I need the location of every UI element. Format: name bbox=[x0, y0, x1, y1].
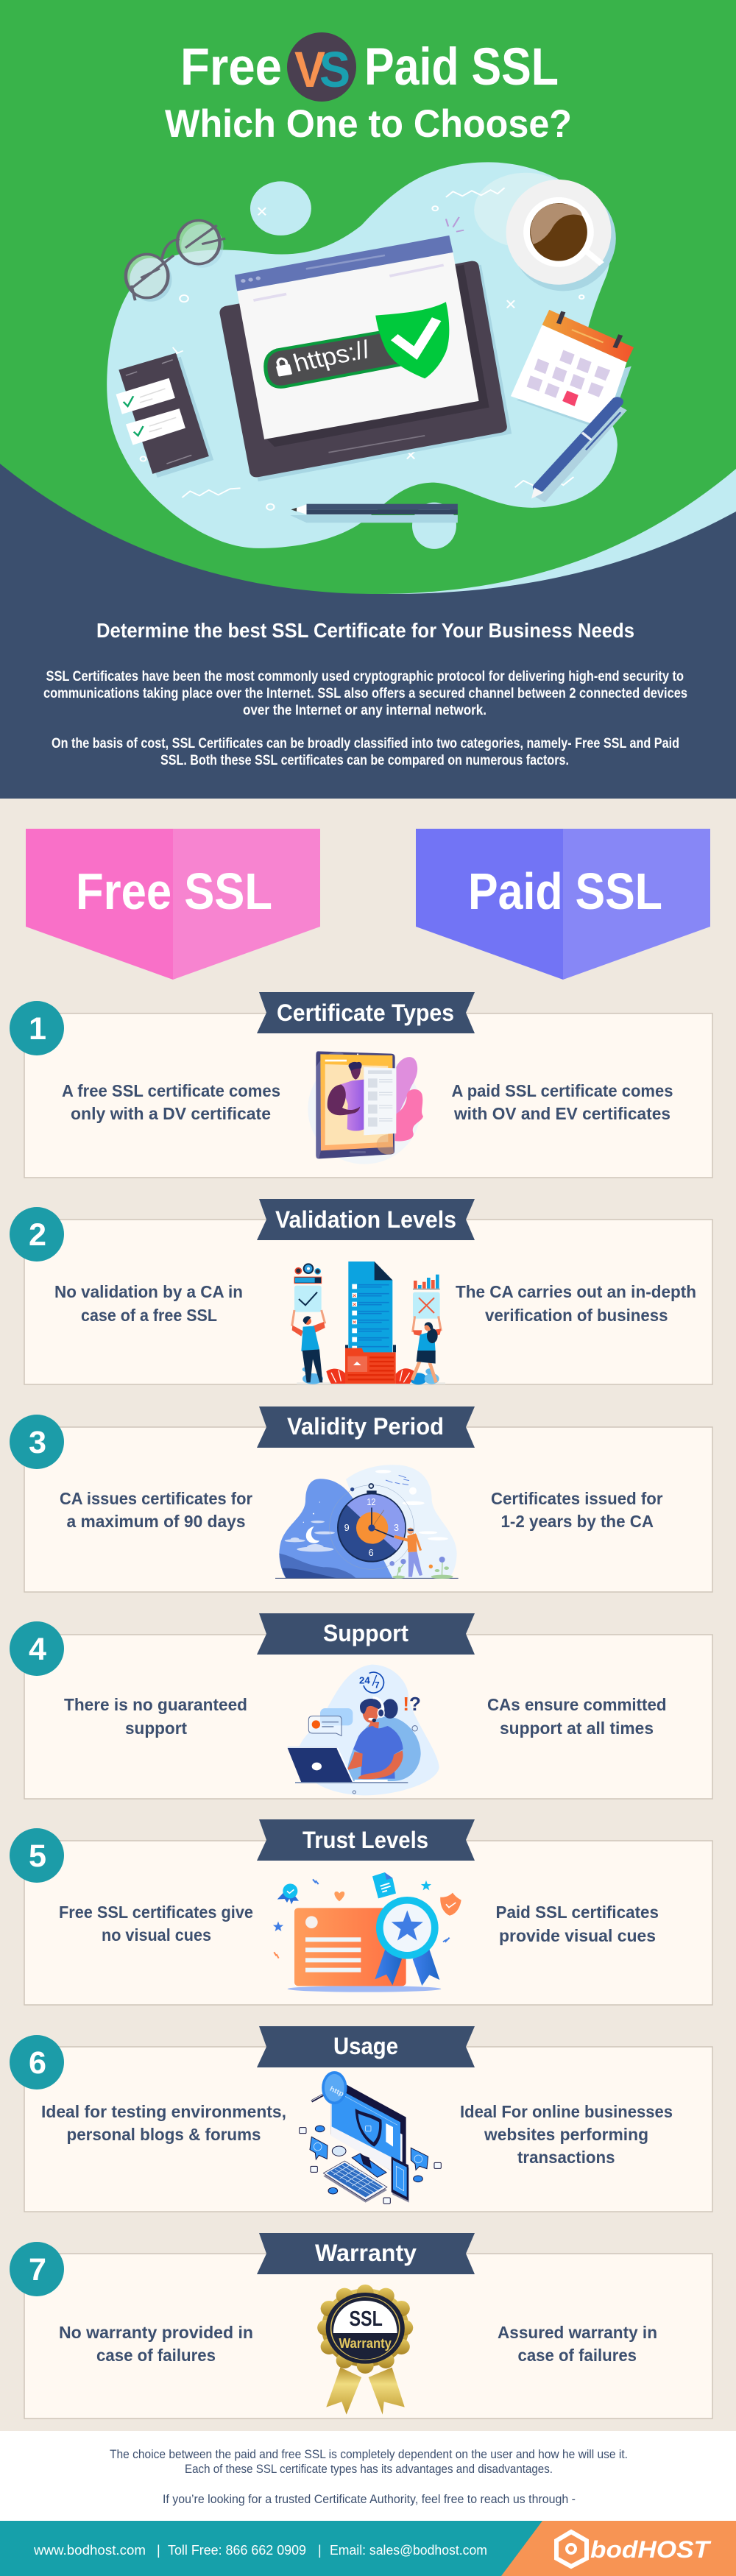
free text bbox=[59, 1903, 253, 1945]
free text: case of failures bbox=[96, 2346, 216, 2365]
illustration: warranty seal bbox=[317, 2285, 413, 2415]
illustration: isometric monitor bbox=[300, 2073, 441, 2204]
free text: case of a free SSL bbox=[81, 1306, 217, 1325]
pennant: free ssl: Free SSL bbox=[76, 863, 272, 920]
side panel bbox=[386, 2123, 393, 2147]
24/7: 7 bbox=[375, 1680, 380, 1690]
panel: validation levels bbox=[10, 1199, 712, 1384]
number 7: 7 bbox=[29, 2252, 46, 2287]
right person with cross bbox=[412, 1275, 441, 1382]
ribbon: Support bbox=[323, 1620, 408, 1646]
agent bbox=[347, 1698, 403, 1779]
heart bbox=[334, 1892, 344, 1901]
decorative squiggles bbox=[141, 188, 584, 510]
title: Free bbox=[180, 38, 282, 96]
free text: A free SSL certificate comes bbox=[62, 1081, 280, 1100]
logo: bodHOST bbox=[590, 2536, 712, 2563]
paid text: A paid SSL certificate comes bbox=[452, 1081, 673, 1100]
phone bbox=[116, 347, 213, 478]
contact details: www.bodhost.com bbox=[33, 2543, 146, 2558]
pennant: free ssl bbox=[26, 829, 320, 980]
paid text: verification of business bbox=[485, 1306, 668, 1325]
ribbon bbox=[257, 992, 475, 1033]
ribbon: Validation Levels bbox=[275, 1206, 456, 1233]
paid text: support at all times bbox=[500, 1719, 654, 1738]
illustration: support agent bbox=[288, 1665, 439, 1795]
browser page bbox=[237, 252, 479, 439]
illustration: tablet person bbox=[308, 1051, 423, 1164]
logo bbox=[556, 2532, 712, 2566]
mini badge bbox=[277, 1883, 299, 1904]
phone bbox=[392, 2156, 409, 2203]
paid text: case of failures bbox=[518, 2346, 637, 2365]
number 1: 1 bbox=[29, 1011, 46, 1047]
sheet bbox=[364, 1067, 396, 1135]
ribbon: Certificate Types bbox=[277, 999, 454, 1026]
free text bbox=[64, 1695, 247, 1738]
paid text bbox=[456, 1282, 696, 1325]
illustration: warranty seal: SSL bbox=[350, 2307, 383, 2331]
number 6 bbox=[10, 2035, 64, 2090]
left person with check bbox=[292, 1264, 325, 1382]
magnifier bbox=[311, 2073, 346, 2103]
contact details: Toll Free: 866 662 0909 bbox=[168, 2543, 306, 2558]
chat bubbles bbox=[320, 1708, 353, 1725]
closing text: The choice between the paid and free SSL is completely dependent on the user and how he will use it. bbox=[110, 2447, 628, 2461]
hero illustration bbox=[107, 162, 634, 549]
free text: Free SSL certificates give bbox=[59, 1903, 253, 1922]
panel: warranty bbox=[10, 2233, 712, 2418]
illustration: clock: 3 bbox=[394, 1523, 399, 1533]
man bbox=[394, 1528, 422, 1577]
vs badge: S bbox=[319, 41, 350, 98]
clock face bbox=[330, 1485, 414, 1569]
paid text: transactions bbox=[517, 2148, 615, 2167]
lilac rays bbox=[446, 217, 464, 232]
calendar bbox=[511, 310, 634, 432]
panel: validity period bbox=[10, 1406, 712, 1592]
ribbon bbox=[257, 1406, 475, 1448]
paid text bbox=[491, 1489, 663, 1531]
panel: certificate types bbox=[10, 992, 712, 1178]
speech tiles bbox=[310, 2137, 428, 2170]
number 2: 2 bbox=[29, 1217, 46, 1253]
stand bbox=[352, 2154, 386, 2177]
number 1 bbox=[10, 1001, 64, 1055]
free text: Ideal for testing environments, bbox=[41, 2102, 286, 2121]
light blue arc band bbox=[353, 442, 736, 594]
paid text: CAs ensure committed bbox=[487, 1695, 667, 1714]
illustration: support agent: ! bbox=[403, 1693, 409, 1715]
red leaves bbox=[326, 1368, 414, 1384]
free text bbox=[62, 1081, 280, 1123]
shield bbox=[375, 302, 449, 378]
free text: only with a DV certificate bbox=[71, 1104, 271, 1123]
ribbon bbox=[257, 1199, 475, 1240]
paid text: websites performing bbox=[484, 2125, 648, 2144]
ribbon bbox=[257, 1819, 475, 1861]
free text bbox=[54, 1282, 243, 1325]
paid text: Ideal For online businesses bbox=[460, 2102, 673, 2121]
pen bbox=[531, 402, 622, 500]
intro paragraphs: SSL. Both these SSL certificates can be compared on numerous factors. bbox=[160, 753, 569, 768]
squiggles bbox=[313, 1879, 319, 1884]
https text: https:// bbox=[290, 336, 374, 378]
intro paragraphs: over the Internet or any internal network. bbox=[243, 703, 486, 718]
plants bbox=[389, 1557, 453, 1579]
green hero area bbox=[0, 0, 736, 594]
folder bbox=[345, 1345, 348, 1352]
24/7 bbox=[359, 1672, 383, 1693]
number 4 bbox=[10, 1621, 64, 1676]
illustration: clock: 12 bbox=[367, 1497, 375, 1507]
title: Paid SSL bbox=[364, 38, 559, 96]
paid text: with OV and EV certificates bbox=[453, 1104, 670, 1123]
contact details: | bbox=[157, 2543, 160, 2558]
ribbon: Warranty bbox=[315, 2240, 417, 2266]
https address bar bbox=[266, 328, 413, 387]
number 5: 5 bbox=[29, 1839, 46, 1874]
panel: usage bbox=[10, 2026, 712, 2212]
paid text: Paid SSL certificates bbox=[496, 1903, 659, 1922]
laptop bbox=[288, 1747, 408, 1783]
paid text bbox=[487, 1695, 667, 1738]
pennant: paid ssl bbox=[416, 829, 710, 980]
keyboard bbox=[323, 2161, 387, 2203]
free text bbox=[60, 1489, 252, 1531]
illustration: support agent: ? bbox=[409, 1693, 421, 1715]
ribbon: Trust Levels bbox=[302, 1827, 428, 1853]
title bbox=[165, 32, 572, 146]
panel: support bbox=[10, 1613, 712, 1799]
number 5 bbox=[10, 1828, 64, 1883]
small cubes and gears bbox=[300, 2126, 441, 2204]
closing text: Each of these SSL certificate types has its advantages and disadvantages. bbox=[185, 2462, 553, 2476]
steam haze bbox=[474, 173, 577, 248]
intro heading: Determine the best SSL Certificate for Your Business Needs bbox=[96, 619, 634, 642]
glasses bbox=[126, 220, 225, 302]
paid text: provide visual cues bbox=[499, 1926, 656, 1945]
free text: There is no guaranteed bbox=[64, 1695, 247, 1714]
vs badge bbox=[287, 32, 356, 102]
contact details: | bbox=[318, 2543, 322, 2558]
paid text: Assured warranty in bbox=[498, 2323, 657, 2342]
footer bar bbox=[0, 2521, 736, 2576]
number 3: 3 bbox=[29, 1425, 46, 1460]
paid text bbox=[498, 2323, 657, 2365]
illustration: clock bbox=[275, 1465, 459, 1579]
closing text: If you’re looking for a trusted Certificate Authority, feel free to reach us through - bbox=[163, 2492, 576, 2506]
document bbox=[372, 1872, 396, 1898]
number 2 bbox=[10, 1207, 64, 1262]
free text: no visual cues bbox=[102, 1925, 211, 1945]
number 3 bbox=[10, 1415, 64, 1469]
document bbox=[348, 1262, 392, 1354]
magnifier: http bbox=[328, 2085, 345, 2098]
24/7: 24 bbox=[359, 1675, 370, 1685]
paid text bbox=[452, 1081, 673, 1123]
person bbox=[341, 1080, 366, 1131]
paid text: Certificates issued for bbox=[491, 1489, 663, 1508]
pencil bbox=[290, 504, 458, 523]
free text: support bbox=[125, 1719, 187, 1738]
shield bbox=[440, 1893, 461, 1916]
illustration: certificate with medal bbox=[273, 1872, 461, 1992]
lock bbox=[274, 358, 292, 377]
ribbon: Usage bbox=[333, 2033, 398, 2059]
paid text bbox=[460, 2102, 673, 2167]
intro paragraphs bbox=[43, 669, 687, 768]
closing text bbox=[110, 2447, 628, 2506]
light blue blob bbox=[107, 162, 618, 549]
ribbon: Validity Period bbox=[287, 1413, 444, 1440]
number 7 bbox=[10, 2242, 64, 2296]
stars bbox=[421, 1880, 431, 1890]
illustration: warranty seal: Warranty bbox=[339, 2336, 392, 2352]
ribbon bbox=[257, 2026, 475, 2067]
illustration: checklist document bbox=[292, 1262, 445, 1384]
contact details: Email: sales@bodhost.com bbox=[330, 2543, 487, 2558]
number 4: 4 bbox=[29, 1632, 46, 1667]
free text bbox=[59, 2323, 253, 2365]
ribbon bbox=[257, 2233, 475, 2274]
title: Which One to Choose? bbox=[165, 102, 572, 146]
free text: No warranty provided in bbox=[59, 2323, 253, 2342]
ribbon bbox=[257, 1613, 475, 1655]
plants bbox=[302, 1367, 439, 1384]
panel: trust levels bbox=[10, 1819, 712, 2005]
free text bbox=[41, 2102, 286, 2144]
free text: No validation by a CA in bbox=[54, 1282, 243, 1301]
illustration: clock: 6 bbox=[369, 1548, 374, 1558]
free text: CA issues certificates for bbox=[60, 1489, 252, 1508]
vs badge: V bbox=[294, 41, 325, 98]
coffee cup bbox=[506, 180, 616, 291]
free text: personal blogs & forums bbox=[66, 2125, 261, 2144]
paid text: 1-2 years by the CA bbox=[500, 1512, 654, 1531]
tablet bbox=[219, 236, 512, 481]
free text: a maximum of 90 days bbox=[66, 1512, 246, 1531]
paid text bbox=[496, 1903, 659, 1945]
contact details bbox=[33, 2543, 487, 2558]
clouds and moon bbox=[285, 1521, 335, 1551]
monitor shield bbox=[355, 2109, 382, 2147]
paid text: The CA carries out an in-depth bbox=[456, 1282, 696, 1301]
number 6: 6 bbox=[29, 2045, 46, 2081]
pennant: paid ssl: Paid SSL bbox=[468, 863, 662, 920]
illustration: clock: 9 bbox=[344, 1523, 350, 1533]
